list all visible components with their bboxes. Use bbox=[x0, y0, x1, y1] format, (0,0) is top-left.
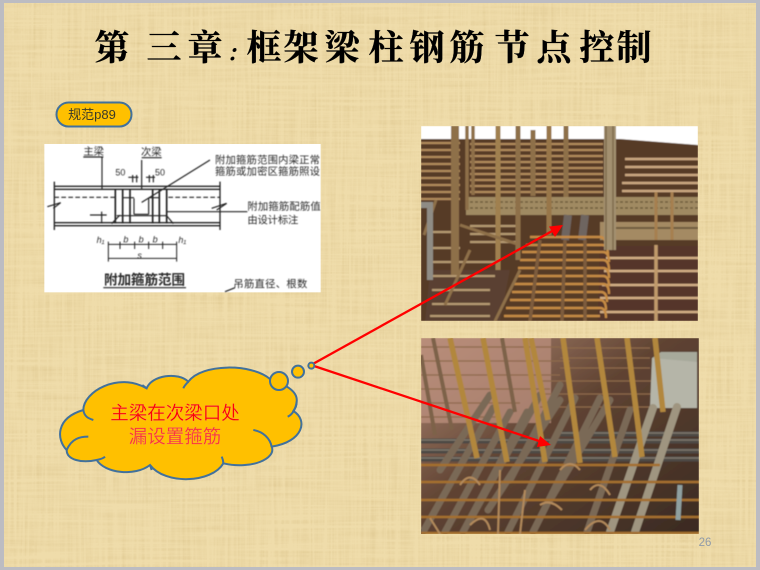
diagram: additional stirrup range bbox=[44, 144, 321, 292]
diagram labels: 主梁 bbox=[83, 145, 104, 158]
callout text line 2: 漏设置箍筋 bbox=[129, 426, 221, 447]
thought bubbles bbox=[270, 363, 314, 390]
diagram labels: 50 bbox=[155, 168, 165, 178]
diagram labels: b bbox=[139, 234, 144, 244]
diagram labels: 附加箍筋配筋值 bbox=[247, 200, 321, 213]
diagram labels: b bbox=[153, 234, 158, 244]
golden vertical rebars bbox=[450, 338, 663, 463]
formwork box bbox=[650, 358, 697, 408]
orange stirrups bbox=[421, 465, 699, 533]
floor mesh bbox=[421, 346, 652, 418]
diagram labels: 吊筋直径、根数 bbox=[233, 278, 308, 291]
stirrups: upper rows bbox=[421, 143, 603, 199]
title: 第三章 : 框架梁柱钢筋节点控制 bbox=[94, 21, 652, 71]
diagram labels: 附加箍筋范围 bbox=[104, 271, 185, 287]
lower dark floor bays bbox=[598, 246, 698, 321]
diagram labels: 次梁 bbox=[141, 146, 162, 159]
arrows bbox=[311, 225, 563, 447]
photo: beam-column rebar joint bbox=[421, 126, 698, 321]
diagram labels: 50 bbox=[115, 168, 125, 178]
diagram labels: h₁ bbox=[178, 235, 186, 245]
diagram labels: 附加箍筋范围内梁正常 bbox=[215, 153, 320, 166]
diagram labels: 箍筋或加密区箍筋照设 bbox=[215, 165, 320, 178]
sky bbox=[421, 126, 698, 145]
additional stirrup bars bbox=[565, 215, 585, 240]
horizontal dark rebars bbox=[421, 434, 699, 459]
callout text: 主梁在次梁口处 bbox=[110, 402, 240, 424]
diagram labels: b bbox=[123, 234, 128, 244]
reference badge: 规范p89 bbox=[68, 107, 116, 122]
diagram linework bbox=[47, 157, 247, 292]
reference badge bbox=[56, 102, 132, 126]
main beam bars bbox=[466, 197, 698, 215]
callout cloud bbox=[60, 363, 314, 479]
vertical rebars bbox=[421, 126, 672, 321]
diagram labels: h₁ bbox=[97, 235, 105, 245]
diagram labels: 由设计标注 bbox=[247, 213, 298, 226]
page number: 26 bbox=[699, 537, 711, 549]
diagonal grey main bars bbox=[423, 385, 630, 532]
diagram labels: s bbox=[137, 250, 142, 260]
diagram labels bbox=[83, 145, 321, 291]
photo: main beam rebars at secondary beam bbox=[421, 338, 699, 534]
